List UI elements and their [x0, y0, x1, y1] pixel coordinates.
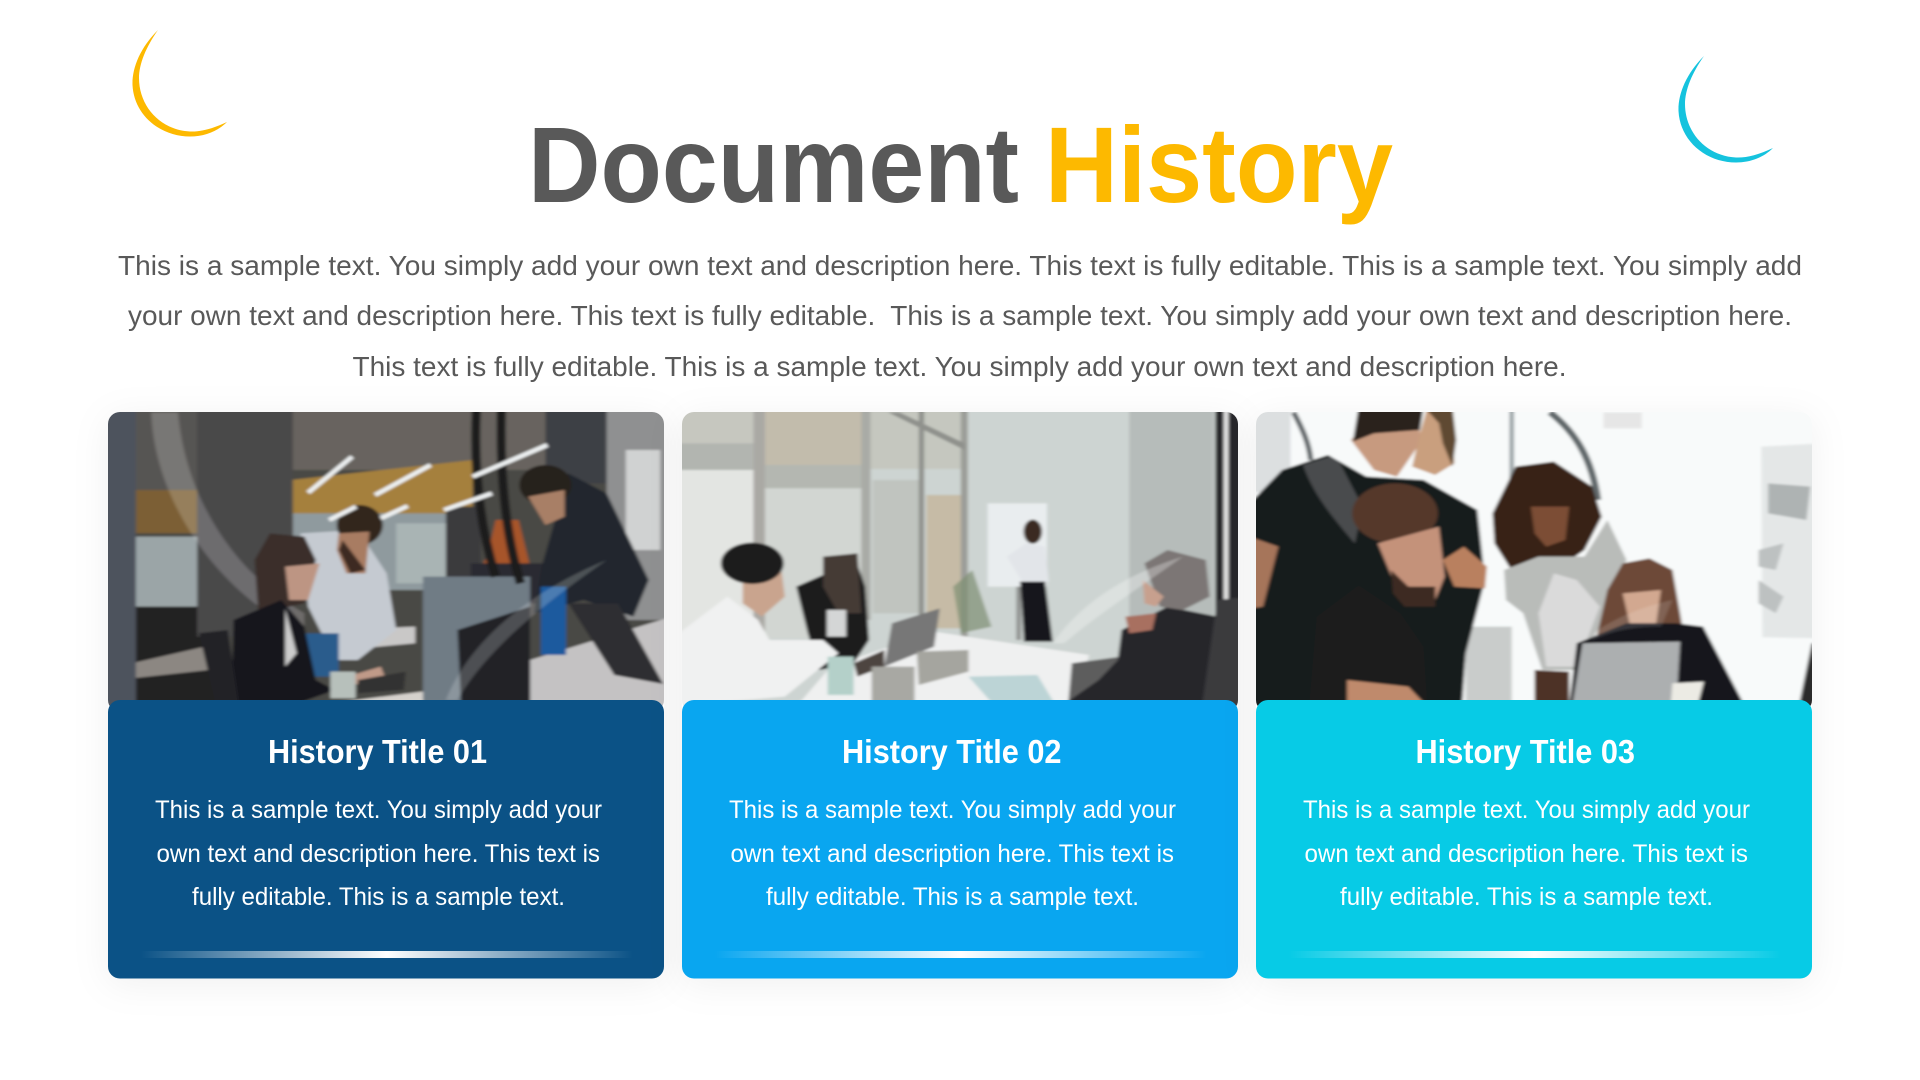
- panel: card 2: [670, 407, 1252, 978]
- card 1 text: [155, 796, 602, 911]
- panel: card 3: [1240, 407, 1822, 978]
- card 2 text: [729, 796, 1176, 911]
- title: Document: [528, 104, 1019, 225]
- card 3 glow bar: [1289, 951, 1781, 958]
- card 1 text: This is a sample text. You simply add your: [155, 796, 602, 824]
- card 1 text: own text and description here. This text is: [156, 840, 600, 868]
- card 2 glow bar: [715, 951, 1207, 958]
- intro text: [118, 250, 1802, 382]
- title: [528, 104, 1393, 225]
- card 2 text: fully editable. This is a sample text.: [766, 883, 1139, 911]
- card 1 body: [108, 700, 664, 978]
- card 2 heading: History Title 02: [842, 733, 1062, 770]
- photo: team laughing around laptop: [1240, 407, 1822, 707]
- photo: meeting room presentation: [670, 407, 1252, 707]
- card 2 body: [682, 700, 1238, 978]
- intro text: This is a sample text. You simply add your own text and description here. This text is fully editable. This is a sample text. You simply add: [118, 250, 1802, 281]
- card 3 text: fully editable. This is a sample text.: [1340, 883, 1713, 911]
- card 1 heading: History Title 01: [268, 733, 487, 770]
- card 3 body: [1256, 700, 1812, 978]
- card 1 text: fully editable. This is a sample text.: [192, 883, 565, 911]
- photo: office team at laptops: [98, 407, 672, 707]
- card 3 text: This is a sample text. You simply add your: [1303, 796, 1750, 824]
- crescent: cyan: [1678, 56, 1773, 162]
- card 2 text: own text and description here. This text is: [730, 840, 1174, 868]
- intro text: your own text and description here. This text is fully editable. This is a sample text. You simply add your own text and description here.: [128, 300, 1792, 331]
- title: History: [1045, 104, 1393, 225]
- crescent: yellow: [132, 30, 227, 136]
- card 3 heading: History Title 03: [1416, 733, 1635, 770]
- panel: card 1: [98, 407, 672, 978]
- card 3 text: [1303, 796, 1750, 911]
- card 3 text: own text and description here. This text is: [1304, 840, 1748, 868]
- card 1 glow bar: [141, 951, 633, 958]
- intro text: This text is fully editable. This is a sample text. You simply add your own text and description here.: [352, 351, 1566, 382]
- card 2 text: This is a sample text. You simply add your: [729, 796, 1176, 824]
